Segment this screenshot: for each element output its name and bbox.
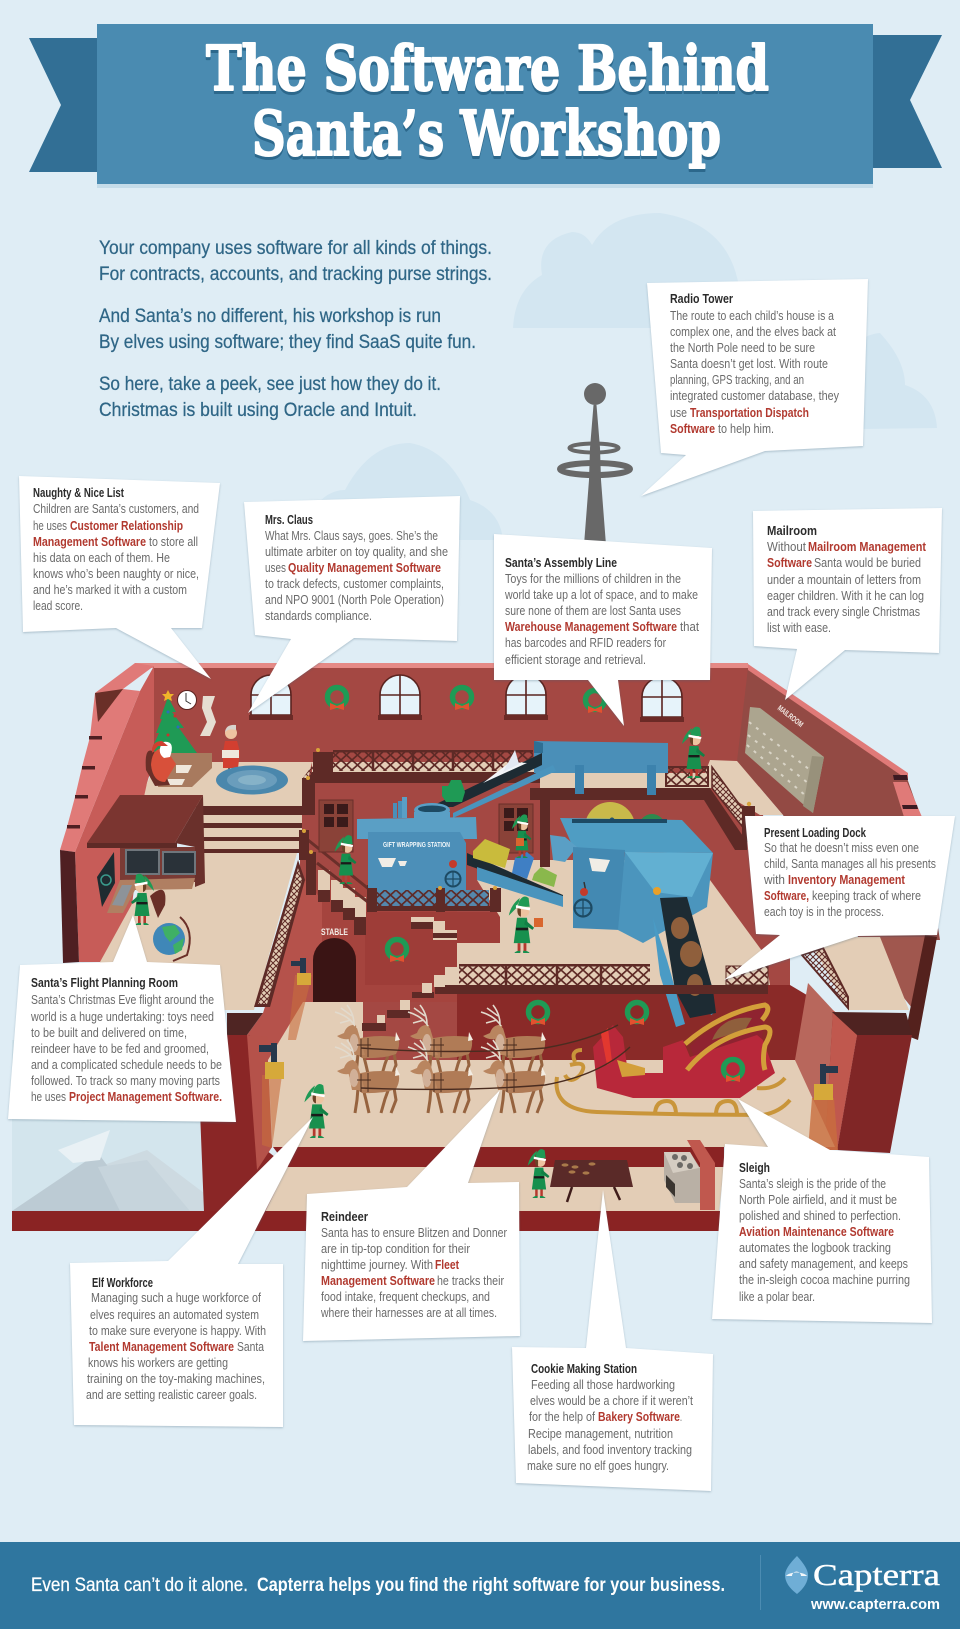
callout: flight planning room: reindeer have to be fed and groomed, — [31, 1041, 209, 1056]
callout: reindeer: he tracks their — [437, 1273, 505, 1288]
mrs claus — [222, 725, 240, 777]
callout: sleigh: North Pole airfield, and it must be — [739, 1192, 897, 1207]
blue rug — [216, 766, 288, 794]
callout: cookie making station: . — [680, 1409, 682, 1424]
callout: naughty and nice list: knows who’s been naughty or nice, — [33, 566, 199, 581]
banner left tail — [29, 38, 97, 172]
callout: elf workforce: knows his workers are getting — [88, 1355, 228, 1370]
presents conveyor — [467, 839, 563, 907]
sleigh — [556, 1005, 790, 1115]
main lower floor — [268, 1002, 835, 1147]
callout: radio tower: Software — [670, 421, 715, 436]
globe — [153, 917, 190, 961]
callout: elf workforce: Santa — [237, 1339, 265, 1354]
callout: reindeer: are in tip-top condition for their — [321, 1241, 471, 1256]
callout: mrs claus: ultimate arbiter on toy quality, and she — [265, 544, 448, 559]
callout: assembly line: Santa’s Assembly Line — [505, 555, 617, 570]
callout: sleigh: Sleigh — [739, 1160, 770, 1175]
back wall — [154, 664, 790, 1060]
callout: sleigh: Santa’s sleigh is the pride of the — [739, 1176, 886, 1191]
callout: flight planning room: Project Management Software. — [69, 1089, 222, 1104]
intro text: By elves using software; they find SaaS quite fun. — [99, 332, 476, 353]
small stairs — [411, 917, 457, 940]
callout: radio tower: planning, GPS tracking, and an — [670, 372, 804, 387]
callout: naughty and nice list: Naughty & Nice List — [33, 485, 125, 500]
footer tagline — [31, 1575, 725, 1596]
callout: reindeer: nighttime journey. With — [321, 1257, 433, 1272]
right wall — [737, 668, 940, 940]
callout: elf workforce: Talent Management Software — [89, 1339, 234, 1354]
callout: sleigh: and safety management, and keeps — [739, 1256, 908, 1271]
callout: mailroom: and track every single Christmas — [767, 604, 920, 619]
callout: radio tower: integrated customer database, they — [670, 388, 840, 403]
callout: assembly line: Toys for the millions of children in the — [505, 571, 681, 586]
decorative clouds — [300, 213, 937, 540]
callout: elf workforce: to make sure everyone is happy. With — [89, 1323, 266, 1338]
callout: flight planning room: Santa’s Christmas Eve flight around the — [31, 992, 214, 1007]
callout: radio tower: Transportation Dispatch — [690, 405, 809, 420]
callout: radio tower: The route to each child’s house is a — [670, 308, 835, 323]
callout: cookie making station — [512, 1190, 713, 1491]
callout: assembly line: that — [680, 619, 699, 634]
callout: sleigh: polished and shined to perfection. — [739, 1208, 901, 1223]
callout: flight planning room — [8, 915, 236, 1122]
right wall lower — [905, 935, 937, 1040]
lower wall left — [197, 1035, 288, 1212]
mailroom shelves — [745, 703, 824, 813]
callout: mrs claus: to track defects, customer complaints, — [265, 576, 444, 591]
intro text: Christmas is built using Oracle and Intuit. — [99, 400, 417, 421]
banner right tail — [873, 35, 942, 168]
callout: reindeer: Santa has to ensure Blitzen and Donner — [321, 1225, 508, 1240]
callout: radio tower: complex one, and the elves back at — [670, 324, 836, 339]
mailroom shelves: MAILROOM — [776, 703, 805, 729]
callout: elf workforce: and are setting realistic career goals. — [86, 1387, 257, 1402]
right mezzanine rail — [666, 767, 755, 842]
stable wall — [270, 880, 457, 1010]
callout: cookie making station: Bakery Software — [598, 1409, 680, 1424]
callout: reindeer: Fleet — [435, 1257, 460, 1272]
reindeer team — [335, 1005, 630, 1113]
callout: flight planning room: and a complicated schedule needs to be — [31, 1057, 222, 1072]
callout: naughty and nice list: Management Software — [33, 534, 146, 549]
elves — [131, 727, 705, 1198]
mezzanine floors — [312, 762, 540, 772]
callout: radio tower — [641, 279, 868, 496]
center doors — [319, 800, 533, 853]
callout: naughty and nice list: to store all — [149, 534, 198, 549]
footer tagline: Even Santa can’t do it alone. — [31, 1575, 248, 1596]
callout: mrs claus: What Mrs. Claus says, goes. She’s the — [265, 528, 438, 543]
intro text: And Santa’s no different, his workshop is run — [99, 306, 441, 327]
santa at desk — [146, 741, 212, 787]
callout: flight planning room: to be built and delivered on time, — [31, 1025, 187, 1040]
callout: mrs claus: Mrs. Claus — [265, 512, 313, 527]
callout: cookie making station: Feeding all those hardworking — [531, 1377, 675, 1392]
capterra url: www.capterra.com — [810, 1596, 940, 1613]
intro text — [99, 238, 492, 421]
callout: assembly line: Warehouse Management Software — [505, 619, 677, 634]
callout: naughty and nice list: his data on each of them. He — [33, 550, 170, 565]
title text — [206, 32, 769, 170]
callout: sleigh: like a polar bear. — [739, 1289, 815, 1304]
callout: sleigh: automates the logbook tracking — [739, 1240, 891, 1255]
callout: elf workforce: elves requires an automated system — [90, 1307, 259, 1322]
cookie table — [550, 1160, 633, 1202]
footer tagline: Capterra helps you find the right software for your business. — [257, 1575, 725, 1596]
callout: assembly line: efficient storage and retrieval. — [505, 652, 646, 667]
capterra wordmark: Capterra — [813, 1557, 940, 1592]
left wall top strip — [60, 663, 154, 852]
callout: present loading dock: keeping track of where — [812, 888, 921, 903]
center block — [365, 912, 500, 985]
upper floor — [142, 762, 312, 806]
callout: mailroom: under a mountain of letters from — [767, 572, 921, 587]
callout: present loading dock: Present Loading Dock — [764, 825, 867, 840]
callout: reindeer: where their harnesses are at all times. — [320, 1305, 497, 1320]
callout: elf workforce: Managing such a huge workforce of — [91, 1290, 261, 1305]
callout: assembly line: has barcodes and RFID readers for — [505, 635, 667, 650]
gift wrapping station — [357, 797, 477, 892]
callout: radio tower: Radio Tower — [670, 291, 733, 306]
middle floor — [457, 860, 770, 985]
callout: present loading dock: with — [763, 872, 785, 887]
stable door — [313, 927, 356, 1002]
callout: reindeer: food intake, frequent checkups, and — [321, 1289, 490, 1304]
callout: present loading dock: Inventory Management — [788, 872, 906, 887]
callout: flight planning room: Santa’s Flight Planning Room — [31, 975, 178, 990]
christmas tree — [153, 690, 197, 753]
callout: naughty and nice list: and he’s marked it with a custom — [33, 582, 187, 597]
callout: mailroom: Mailroom Management — [808, 539, 927, 554]
wreaths — [328, 688, 646, 1025]
title banner — [29, 24, 942, 188]
lower left floor — [100, 853, 297, 1010]
radio tower — [560, 383, 630, 545]
callout: mrs claus — [244, 496, 460, 713]
callout: mrs claus: standards compliance. — [265, 608, 372, 623]
center stairs — [362, 967, 459, 1031]
mountain view lower left — [12, 1040, 204, 1212]
callout: cookie making station: labels, and food inventory tracking — [528, 1442, 692, 1457]
callout: cookie making station: for the help of — [529, 1409, 595, 1424]
front rail — [368, 886, 501, 912]
title text: Santa’s Workshop — [252, 97, 721, 170]
callout: elf workforce — [70, 1117, 313, 1427]
list on wall — [200, 696, 216, 736]
sacks conveyor — [653, 897, 716, 1027]
callout: cookie making station: make sure no elf goes hungry. — [527, 1458, 669, 1473]
callout: sleigh: the in-sleigh cocoa machine purring — [739, 1272, 910, 1287]
stable door: STABLE — [321, 927, 348, 938]
callout: mrs claus: and NPO 9001 (North Pole Operation) — [265, 592, 444, 607]
callout: elf workforce: training on the toy-making machines, — [87, 1371, 265, 1386]
callout: naughty and nice list: Customer Relationship — [70, 518, 183, 533]
callout: cookie making station: elves would be a chore if it weren’t — [530, 1393, 693, 1408]
callout: present loading dock: each toy is in the process. — [764, 904, 884, 919]
callout: naughty and nice list: Children are Santa’s customers, and — [33, 501, 199, 516]
callout: assembly line: sure none of them are lost Santa uses — [505, 603, 681, 618]
lower dark wall — [457, 985, 857, 1150]
callout: radio tower: to help him. — [718, 421, 774, 436]
callout: assembly line — [494, 534, 712, 726]
intro text: Your company uses software for all kinds of things. — [99, 238, 492, 259]
flight room booth — [87, 795, 205, 918]
callout: reindeer — [303, 1090, 520, 1341]
callout: mailroom: Mailroom — [767, 523, 817, 538]
callout: mailroom — [753, 508, 942, 700]
callout: radio tower: Santa doesn’t get lost. With route — [670, 356, 828, 371]
callout: reindeer: Management Software — [321, 1273, 435, 1288]
right fence — [802, 948, 848, 1008]
back rail — [333, 750, 533, 771]
callout: radio tower: the North Pole need to be sure — [670, 340, 815, 355]
callout: radio tower: use — [670, 405, 687, 420]
upper rail posts — [302, 748, 333, 815]
callout: cookie making station: Recipe management, nutrition — [528, 1426, 673, 1441]
callout: sleigh: Aviation Maintenance Software — [739, 1224, 894, 1239]
left staircase — [299, 829, 377, 935]
callout: mailroom: Software — [767, 555, 812, 570]
callout: assembly line: world take up a lot of space, and to make — [504, 587, 698, 602]
left fence — [254, 860, 305, 1007]
mid floor rail — [435, 964, 768, 994]
left wall inner face — [75, 666, 154, 962]
callout: cookie making station: Cookie Making Station — [531, 1361, 637, 1376]
callout: mailroom: eager children. With it he can log — [767, 588, 924, 603]
gift wrapping station: GIFT WRAPPING STATION — [383, 840, 450, 849]
callout: naughty and nice list: lead score. — [33, 598, 83, 613]
title text: The Software Behind — [206, 32, 769, 105]
windows — [249, 675, 684, 722]
stove and counter — [664, 1140, 715, 1210]
workshop illustration — [12, 663, 940, 1231]
wall lamps — [259, 958, 838, 1150]
callout: mailroom: Without — [767, 539, 806, 554]
callout: reindeer: Reindeer — [321, 1209, 368, 1224]
callout: mrs claus: uses — [265, 560, 286, 575]
intro text: For contracts, accounts, and tracking purse strings. — [99, 264, 492, 285]
callout: sleigh — [712, 1099, 932, 1323]
callout: flight planning room: he uses — [31, 1089, 66, 1104]
callout: flight planning room: followed. To track so many moving parts — [31, 1073, 220, 1088]
callout: flight planning room: world is a huge undertaking: toys need — [30, 1009, 214, 1024]
callout: naughty and nice list — [19, 476, 220, 679]
banner main panel — [97, 24, 873, 184]
clock — [178, 690, 196, 710]
callout: present loading dock: So that he doesn’t miss even one — [764, 840, 919, 855]
callout: elf workforce: Elf Workforce — [92, 1275, 153, 1290]
stairs from upper floor — [203, 806, 303, 853]
callout: mailroom: Santa would be buried — [814, 555, 921, 570]
callout: present loading dock: Software, — [764, 888, 809, 903]
toy making machine — [550, 802, 713, 943]
callout: mailroom: list with ease. — [767, 620, 831, 635]
callout: present loading dock — [724, 816, 955, 980]
callout: naughty and nice list: he uses — [33, 518, 67, 533]
callout: mrs claus: Quality Management Software — [288, 560, 441, 575]
upper machine and conveyor — [430, 741, 668, 818]
footer bar — [0, 1542, 960, 1629]
capterra logo drop — [785, 1556, 808, 1594]
intro text: So here, take a peek, see just how they do it. — [99, 374, 441, 395]
